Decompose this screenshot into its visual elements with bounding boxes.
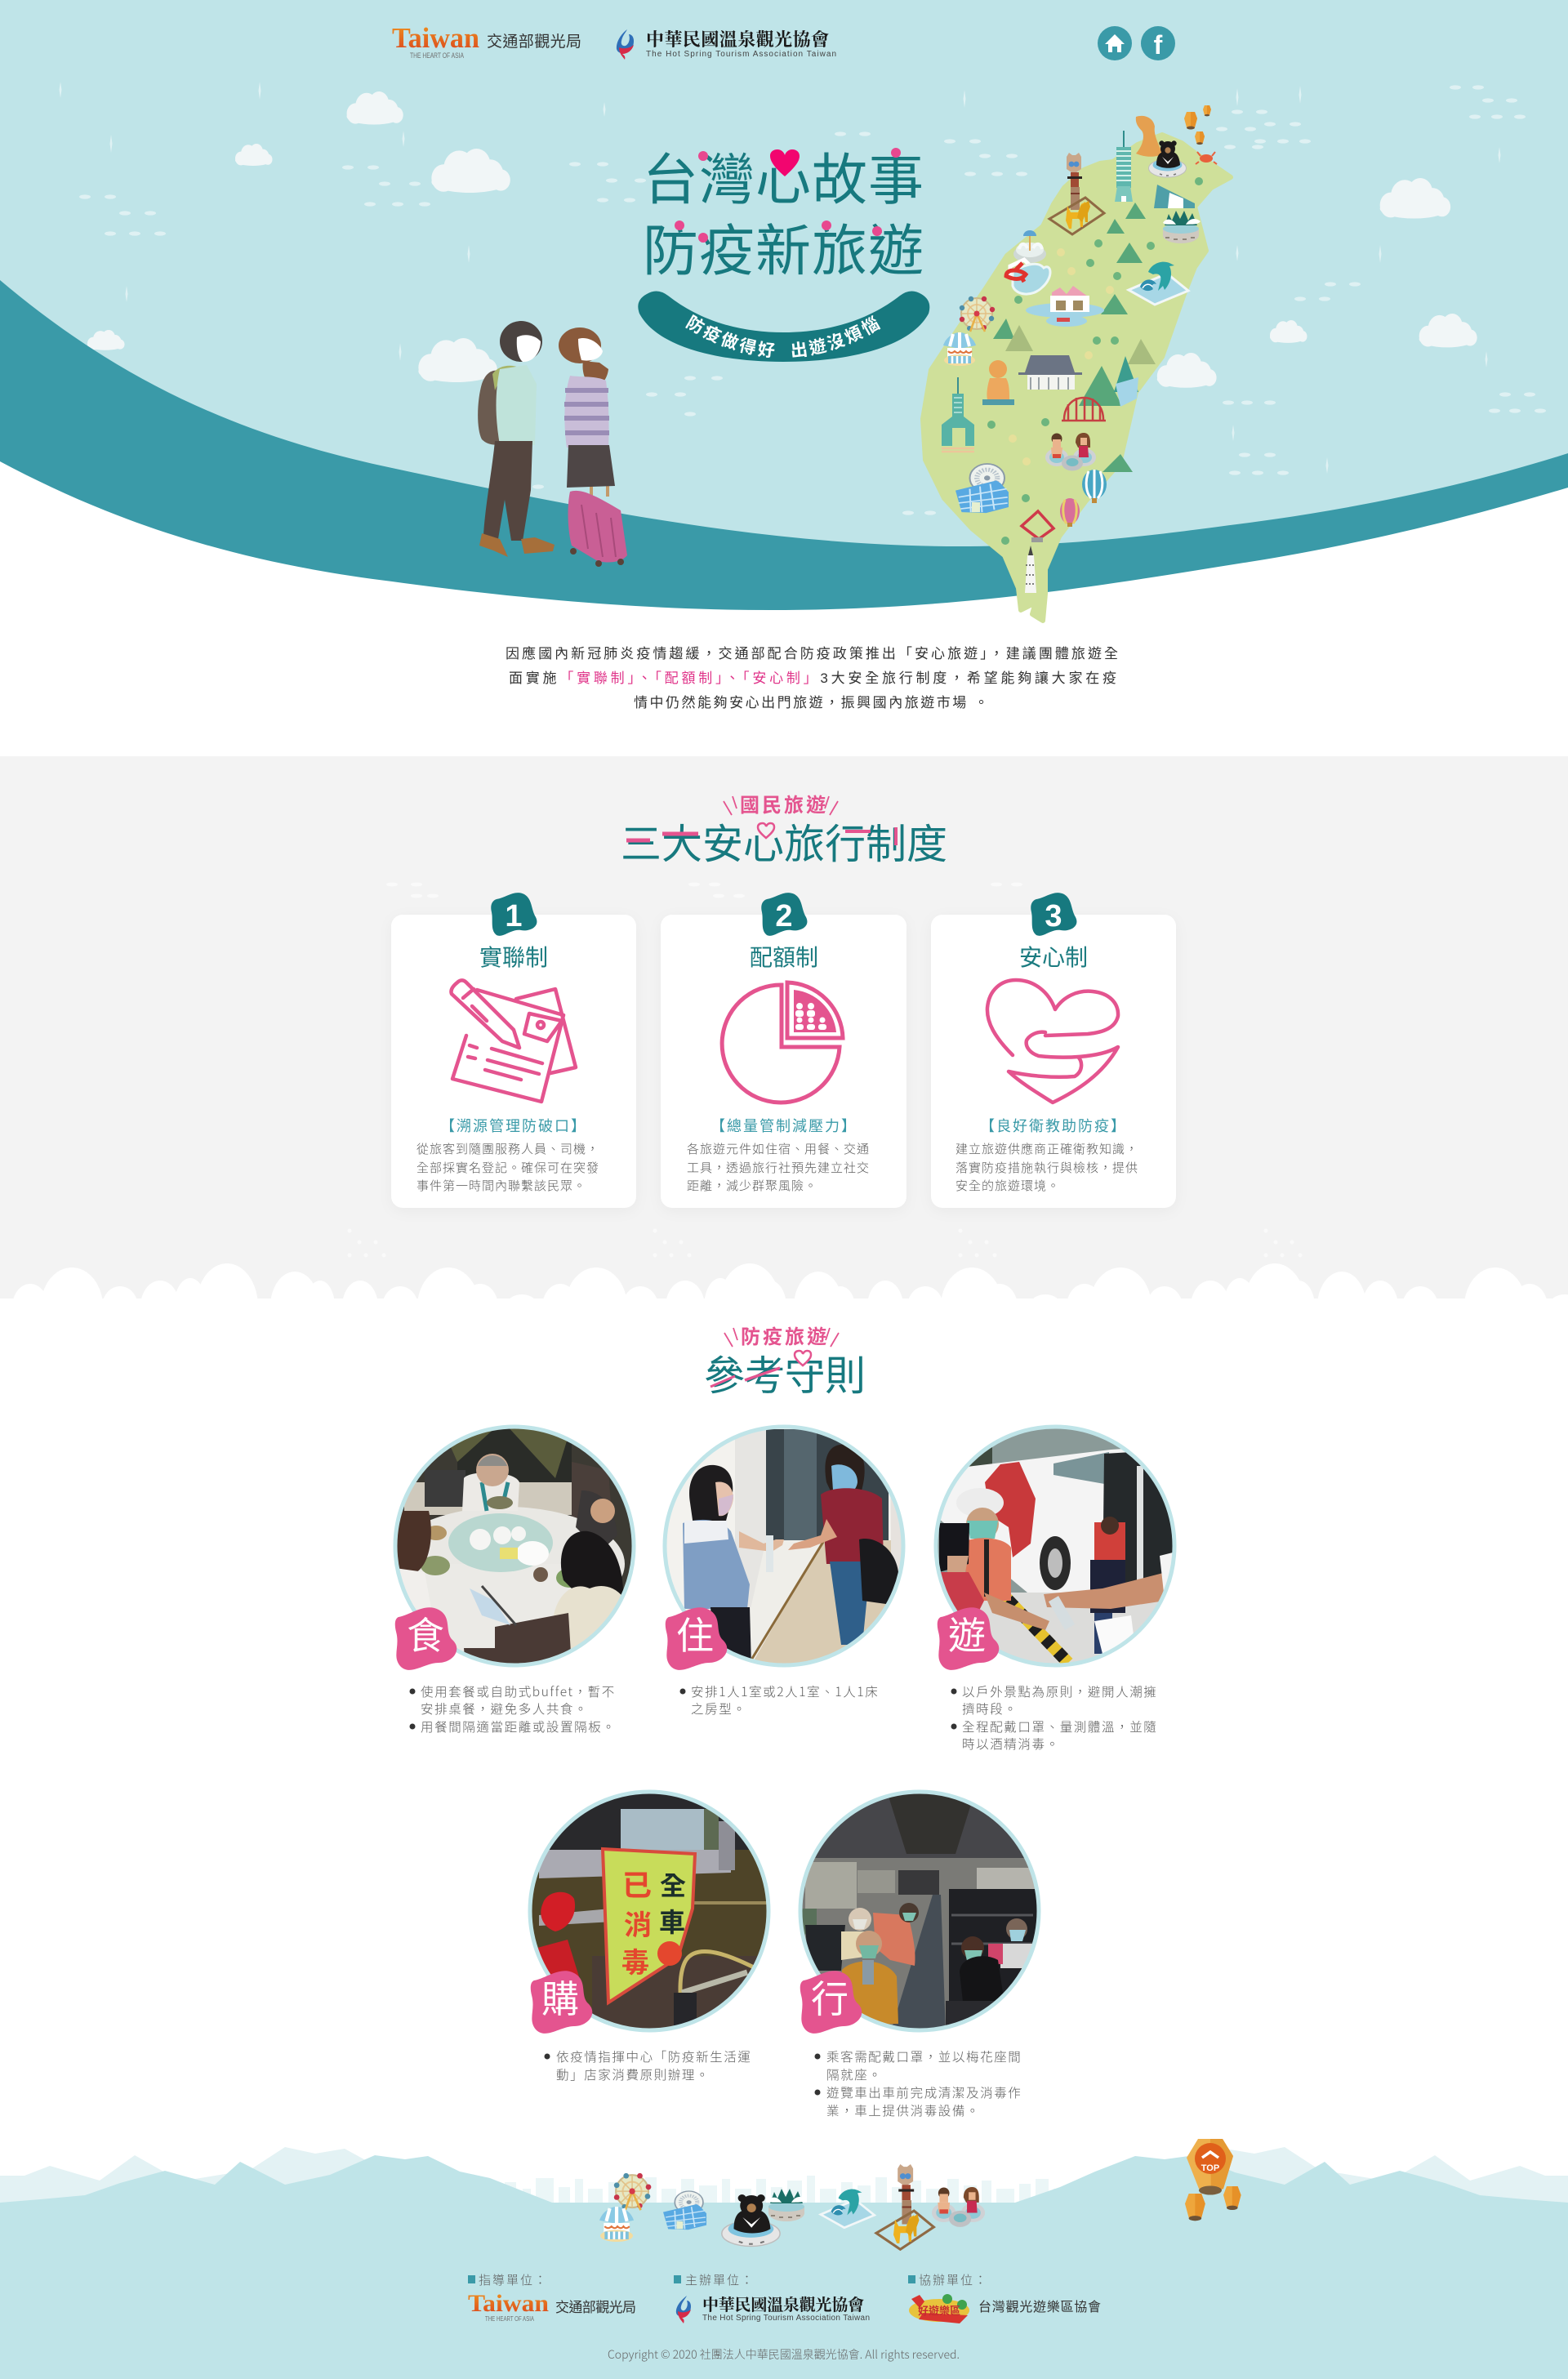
white cloud edge bbox=[0, 1263, 1568, 1350]
icon: heart with hugging arms bbox=[987, 980, 1118, 1103]
photo: disinfected sign on coach: 毒 bbox=[621, 1940, 649, 1980]
badge 行 bbox=[800, 1970, 862, 2034]
teal sweeping band with white ground below bbox=[0, 280, 1568, 629]
panel: card 1 實聯制: 全部採實名登記。確保可在突發 bbox=[416, 1159, 599, 1176]
map: geyser hot spring bbox=[1163, 211, 1200, 243]
panel: card 2 配額制: 配額制 bbox=[750, 940, 818, 973]
panel: food photo circle bbox=[388, 1425, 637, 1670]
footer icon: geyser bbox=[768, 2189, 806, 2221]
map: trees bbox=[987, 177, 1203, 545]
panel: card 3 安心制: 建立旅遊供應商正確衛教知識， bbox=[956, 1140, 1138, 1157]
footer sponsor: guidance unit: THE HEART OF ASIA bbox=[485, 2315, 535, 2323]
panel: lodging photo circle bbox=[662, 1425, 906, 1670]
text block: lodging rules bbox=[679, 1682, 879, 1717]
footer sponsor: organizer: The Hot Spring Tourism Association Taiwan bbox=[702, 2314, 870, 2323]
footer landmark icons bbox=[599, 2164, 985, 2249]
text block: sightseeing rules: 擠時段。 bbox=[962, 1700, 1018, 1717]
map: Taipei 101 tower bbox=[1115, 131, 1133, 202]
footer icon: hot spring couple bbox=[932, 2187, 985, 2227]
badge 食: 食 bbox=[407, 1606, 444, 1660]
map: fountain plaza bbox=[1013, 230, 1046, 263]
icon: facebook button bbox=[1141, 26, 1175, 60]
text block: shopping rules bbox=[544, 2047, 751, 2083]
panel: gray section background bbox=[0, 756, 1568, 1303]
text block: lodging rules: 之房型。 bbox=[691, 1700, 746, 1717]
panel: sightseeing photo circle bbox=[935, 1425, 1180, 1674]
text block: sightseeing rules bbox=[951, 1682, 1157, 1753]
panel: card 2 配額制: 各旅遊元件如住宿、用餐、交通 bbox=[687, 1140, 870, 1157]
header logo: Taiwan tourism bureau bbox=[392, 22, 581, 60]
panel: card 2 配額制: 工具，透過旅行社預先建立社交 bbox=[687, 1159, 870, 1176]
map: temple bbox=[1018, 355, 1082, 390]
text block: shopping rules: 動」店家消費原則辦理。 bbox=[556, 2065, 710, 2083]
text block: sightseeing rules: 時以酒精消毒。 bbox=[962, 1735, 1060, 1753]
panel: card 3 安心制: 落實防疫措施執行與檢核，提供 bbox=[956, 1159, 1138, 1176]
footer sponsor: co-organizer bbox=[908, 2271, 1101, 2323]
photo: disinfected sign on coach: 已 bbox=[622, 1862, 652, 1905]
illustration: traveller woman with pink suitcase bbox=[559, 327, 627, 567]
map: red diamond landmark bbox=[1022, 511, 1054, 542]
badge 食 bbox=[395, 1606, 457, 1670]
text block: food rules: 使用套餐或自助式buffet，暫不 bbox=[421, 1682, 616, 1700]
main title bbox=[643, 135, 924, 287]
icon: contact form and pencil bbox=[451, 980, 576, 1102]
footer icon: blue arena bbox=[663, 2191, 706, 2230]
photo: disinfected sign on coach: 消 bbox=[624, 1903, 652, 1943]
header logo: Hot Spring Tourism Association: 中華民國溫泉觀光協會 bbox=[646, 26, 829, 51]
text block: transport rules: 隔就座。 bbox=[826, 2065, 882, 2083]
photo: disinfected sign on coach bbox=[527, 1789, 772, 2034]
number badge 3: 3 bbox=[1045, 899, 1062, 933]
map of Taiwan with landmark icons bbox=[923, 105, 1231, 621]
map: Yehliu rock bbox=[1136, 116, 1163, 157]
panel: card 3 安心制 bbox=[931, 893, 1176, 1208]
number badge 3 bbox=[1031, 893, 1076, 936]
footer icon: bear in hot spring bbox=[722, 2194, 780, 2246]
main title: 台灣心故事 bbox=[643, 135, 924, 216]
icon: facebook button: f bbox=[1154, 30, 1163, 60]
map: golden deer enclosure bbox=[1049, 198, 1104, 234]
footer sponsor: organizer: 中華民國溫泉觀光協會 bbox=[702, 2292, 864, 2315]
header logo: Taiwan tourism bureau: THE HEART OF ASIA bbox=[410, 51, 464, 60]
panel: card 1 實聯制 bbox=[391, 893, 636, 1208]
map: bear in hot spring bbox=[1148, 140, 1186, 177]
footer sponsor: co-organizer: 協辦單位： bbox=[919, 2271, 988, 2288]
panel: card 1 實聯制: 【溯源管理防破口】 bbox=[440, 1115, 587, 1136]
map: pink-roofed palace and lake bbox=[1026, 286, 1104, 327]
smile banner with slogan: 防疫做得好 出遊沒煩惱 bbox=[685, 314, 880, 358]
footer sponsor: co-organizer: 好遊樂區 bbox=[918, 2302, 960, 2318]
badge 住 bbox=[666, 1606, 727, 1670]
map: museum building bbox=[1154, 185, 1195, 208]
footer sponsor: co-organizer: 台灣觀光遊樂區協會 bbox=[978, 2296, 1101, 2315]
map: carousel bbox=[943, 332, 976, 366]
text block: transport rules: 業，車上提供消毒設備。 bbox=[826, 2101, 980, 2119]
footer sponsor: guidance unit: 指導單位： bbox=[479, 2271, 548, 2288]
panel: shopping photo circle bbox=[527, 1789, 772, 2034]
icon: home button bbox=[1098, 26, 1132, 60]
text block: transport rules bbox=[815, 2047, 1022, 2119]
photo: disinfected sign on coach: 全 bbox=[660, 1865, 686, 1903]
map: 85 Sky Tower bbox=[942, 377, 974, 452]
panel: transport photo circle bbox=[799, 1789, 1044, 2034]
gray section decorative dots bbox=[348, 883, 1302, 1258]
text block: lodging rules: 安排1人1室或2人1室、1人1床 bbox=[691, 1682, 879, 1700]
illustration: traveller man bbox=[478, 321, 555, 557]
number badge 1: 1 bbox=[505, 899, 523, 933]
panel: card 3 安心制: 安全的旅遊環境。 bbox=[956, 1177, 1060, 1194]
icon: pie chart with group quota bbox=[722, 982, 843, 1103]
footer sponsor: organizer bbox=[674, 2271, 870, 2323]
panel: card 1 實聯制: 從旅客到隨團服務人員、司機， bbox=[416, 1140, 599, 1157]
panel: card 3 安心制: 安心制 bbox=[1019, 940, 1088, 973]
section heading: three travel systems: 國民旅遊 bbox=[740, 789, 828, 818]
intro paragraph: 情中仍然能夠安心出門旅遊，振興國內旅遊市場 。 bbox=[634, 695, 988, 711]
badge 遊 bbox=[938, 1606, 999, 1670]
footer sponsor: guidance unit: 交通部觀光局 bbox=[555, 2296, 636, 2316]
section heading: reference rules: 防疫旅遊 bbox=[741, 1321, 829, 1349]
header logo: Taiwan tourism bureau: Taiwan bbox=[392, 22, 479, 54]
photo: disinfected sign on coach: 車 bbox=[659, 1902, 685, 1940]
hero decorative clouds bbox=[87, 91, 1477, 388]
badge 購 bbox=[531, 1970, 592, 2034]
header logo: Hot Spring Tourism Association bbox=[617, 26, 836, 60]
map: lighthouse bbox=[1025, 546, 1036, 593]
map: hot spring couple bbox=[1045, 433, 1096, 470]
badge 購: 購 bbox=[541, 1970, 579, 2024]
text block: food rules: 安排桌餐，避免多人共食。 bbox=[421, 1700, 588, 1717]
map: sky lanterns bbox=[1184, 105, 1211, 145]
map: waterfall bbox=[1116, 377, 1138, 407]
text block: shopping rules: 依疫情指揮中心「防疫新生活運 bbox=[556, 2047, 751, 2065]
panel: card 1 實聯制: 實聯制 bbox=[479, 940, 548, 973]
map: blue hot-air balloon bbox=[1082, 470, 1107, 503]
map: red water slide and pool bbox=[1006, 260, 1050, 294]
number badge 1 bbox=[491, 893, 537, 936]
main title: 防疫新旅遊 bbox=[643, 206, 924, 287]
number badge 2 bbox=[761, 893, 807, 936]
header logo: Taiwan tourism bureau: 交通部觀光局 bbox=[487, 33, 581, 51]
panel: card 2 配額制: 距離，減少群聚風險。 bbox=[687, 1177, 817, 1194]
footer icon: totem and deer bbox=[876, 2164, 933, 2249]
footer sponsor: organizer: 主辦單位： bbox=[685, 2271, 755, 2288]
hero decorative dashes bbox=[59, 82, 1546, 515]
number badge 2: 2 bbox=[775, 899, 793, 933]
photo: tour bus and hand sanitizing bbox=[935, 1425, 1180, 1674]
photo: masked passengers on coach bbox=[799, 1789, 1044, 2034]
smile banner with slogan bbox=[638, 291, 929, 362]
hero background sky bbox=[0, 0, 1568, 621]
text block: transport rules: 遊覽車出車前完成清潔及消毒作 bbox=[826, 2083, 1022, 2101]
map: green and olive mountains bbox=[993, 203, 1156, 472]
badge 行: 行 bbox=[811, 1970, 849, 2024]
section heading: reference rules: 參考守則 bbox=[704, 1343, 866, 1402]
badge 遊: 遊 bbox=[948, 1606, 986, 1660]
section heading: three travel systems: 三大安心旅行制度 bbox=[621, 812, 947, 871]
footer icon: dolphin bbox=[821, 2190, 875, 2228]
map: Buddha statue bbox=[982, 360, 1014, 405]
map: totem pole bbox=[1067, 153, 1082, 210]
text block: transport rules: 乘客需配戴口罩，並以梅花座間 bbox=[826, 2047, 1022, 2065]
map: dolphin and wave bbox=[1129, 262, 1188, 305]
badge 住: 住 bbox=[676, 1606, 714, 1660]
text block: sightseeing rules: 以戶外景點為原則，避開人潮擁 bbox=[962, 1682, 1157, 1700]
panel: card 2 配額制: 【總量管制減壓力】 bbox=[710, 1115, 858, 1136]
photo: hand sanitizing at hotel bbox=[662, 1425, 906, 1670]
panel: card 2 配額制 bbox=[661, 893, 906, 1208]
text block: food rules: 用餐間隔適當距離或設置隔板。 bbox=[421, 1717, 616, 1735]
map: red arched bridge bbox=[1062, 397, 1106, 421]
text block: food rules bbox=[410, 1682, 616, 1735]
map: crab bbox=[1196, 152, 1217, 164]
intro paragraph: 面實施「實聯制」、「配額制」、「安心制」3大安全旅行制度，希望能夠讓大家在疫 bbox=[509, 670, 1116, 686]
footer background: layered mountains and skyline bbox=[0, 2147, 1568, 2379]
map: Ferris wheel and blue arena bbox=[956, 464, 1009, 513]
map: ferris wheel bbox=[960, 296, 995, 332]
intro paragraph: 因應國內新冠肺炎疫情趨緩，交通部配合防疫政策推出「安心旅遊」，建議團體旅遊全 bbox=[506, 645, 1118, 662]
panel: card 1 實聯制: 事件第一時間內聯繫該民眾。 bbox=[416, 1177, 586, 1194]
back to top lantern button bbox=[1185, 2139, 1241, 2221]
footer icon: ferris wheel and carousel bbox=[599, 2173, 651, 2242]
text block: sightseeing rules: 全程配戴口罩、量測體溫，並隨 bbox=[962, 1717, 1157, 1735]
photo: round table dining bbox=[388, 1425, 637, 1670]
back to top lantern button: TOP bbox=[1201, 2163, 1219, 2173]
intro paragraph bbox=[506, 645, 1118, 711]
copyright line: Copyright © 2020 社團法人中華民國溫泉觀光協會. All rights reserved. bbox=[608, 2346, 960, 2363]
header logo: Hot Spring Tourism Association: The Hot Spring Tourism Association Taiwan bbox=[646, 50, 836, 59]
map: pink hot-air balloon bbox=[1060, 498, 1080, 527]
footer sponsor: guidance unit: Taiwan bbox=[468, 2290, 549, 2317]
panel: card 3 安心制: 【良好衛教助防疫】 bbox=[980, 1115, 1127, 1136]
footer sponsor: guidance unit bbox=[468, 2271, 636, 2323]
